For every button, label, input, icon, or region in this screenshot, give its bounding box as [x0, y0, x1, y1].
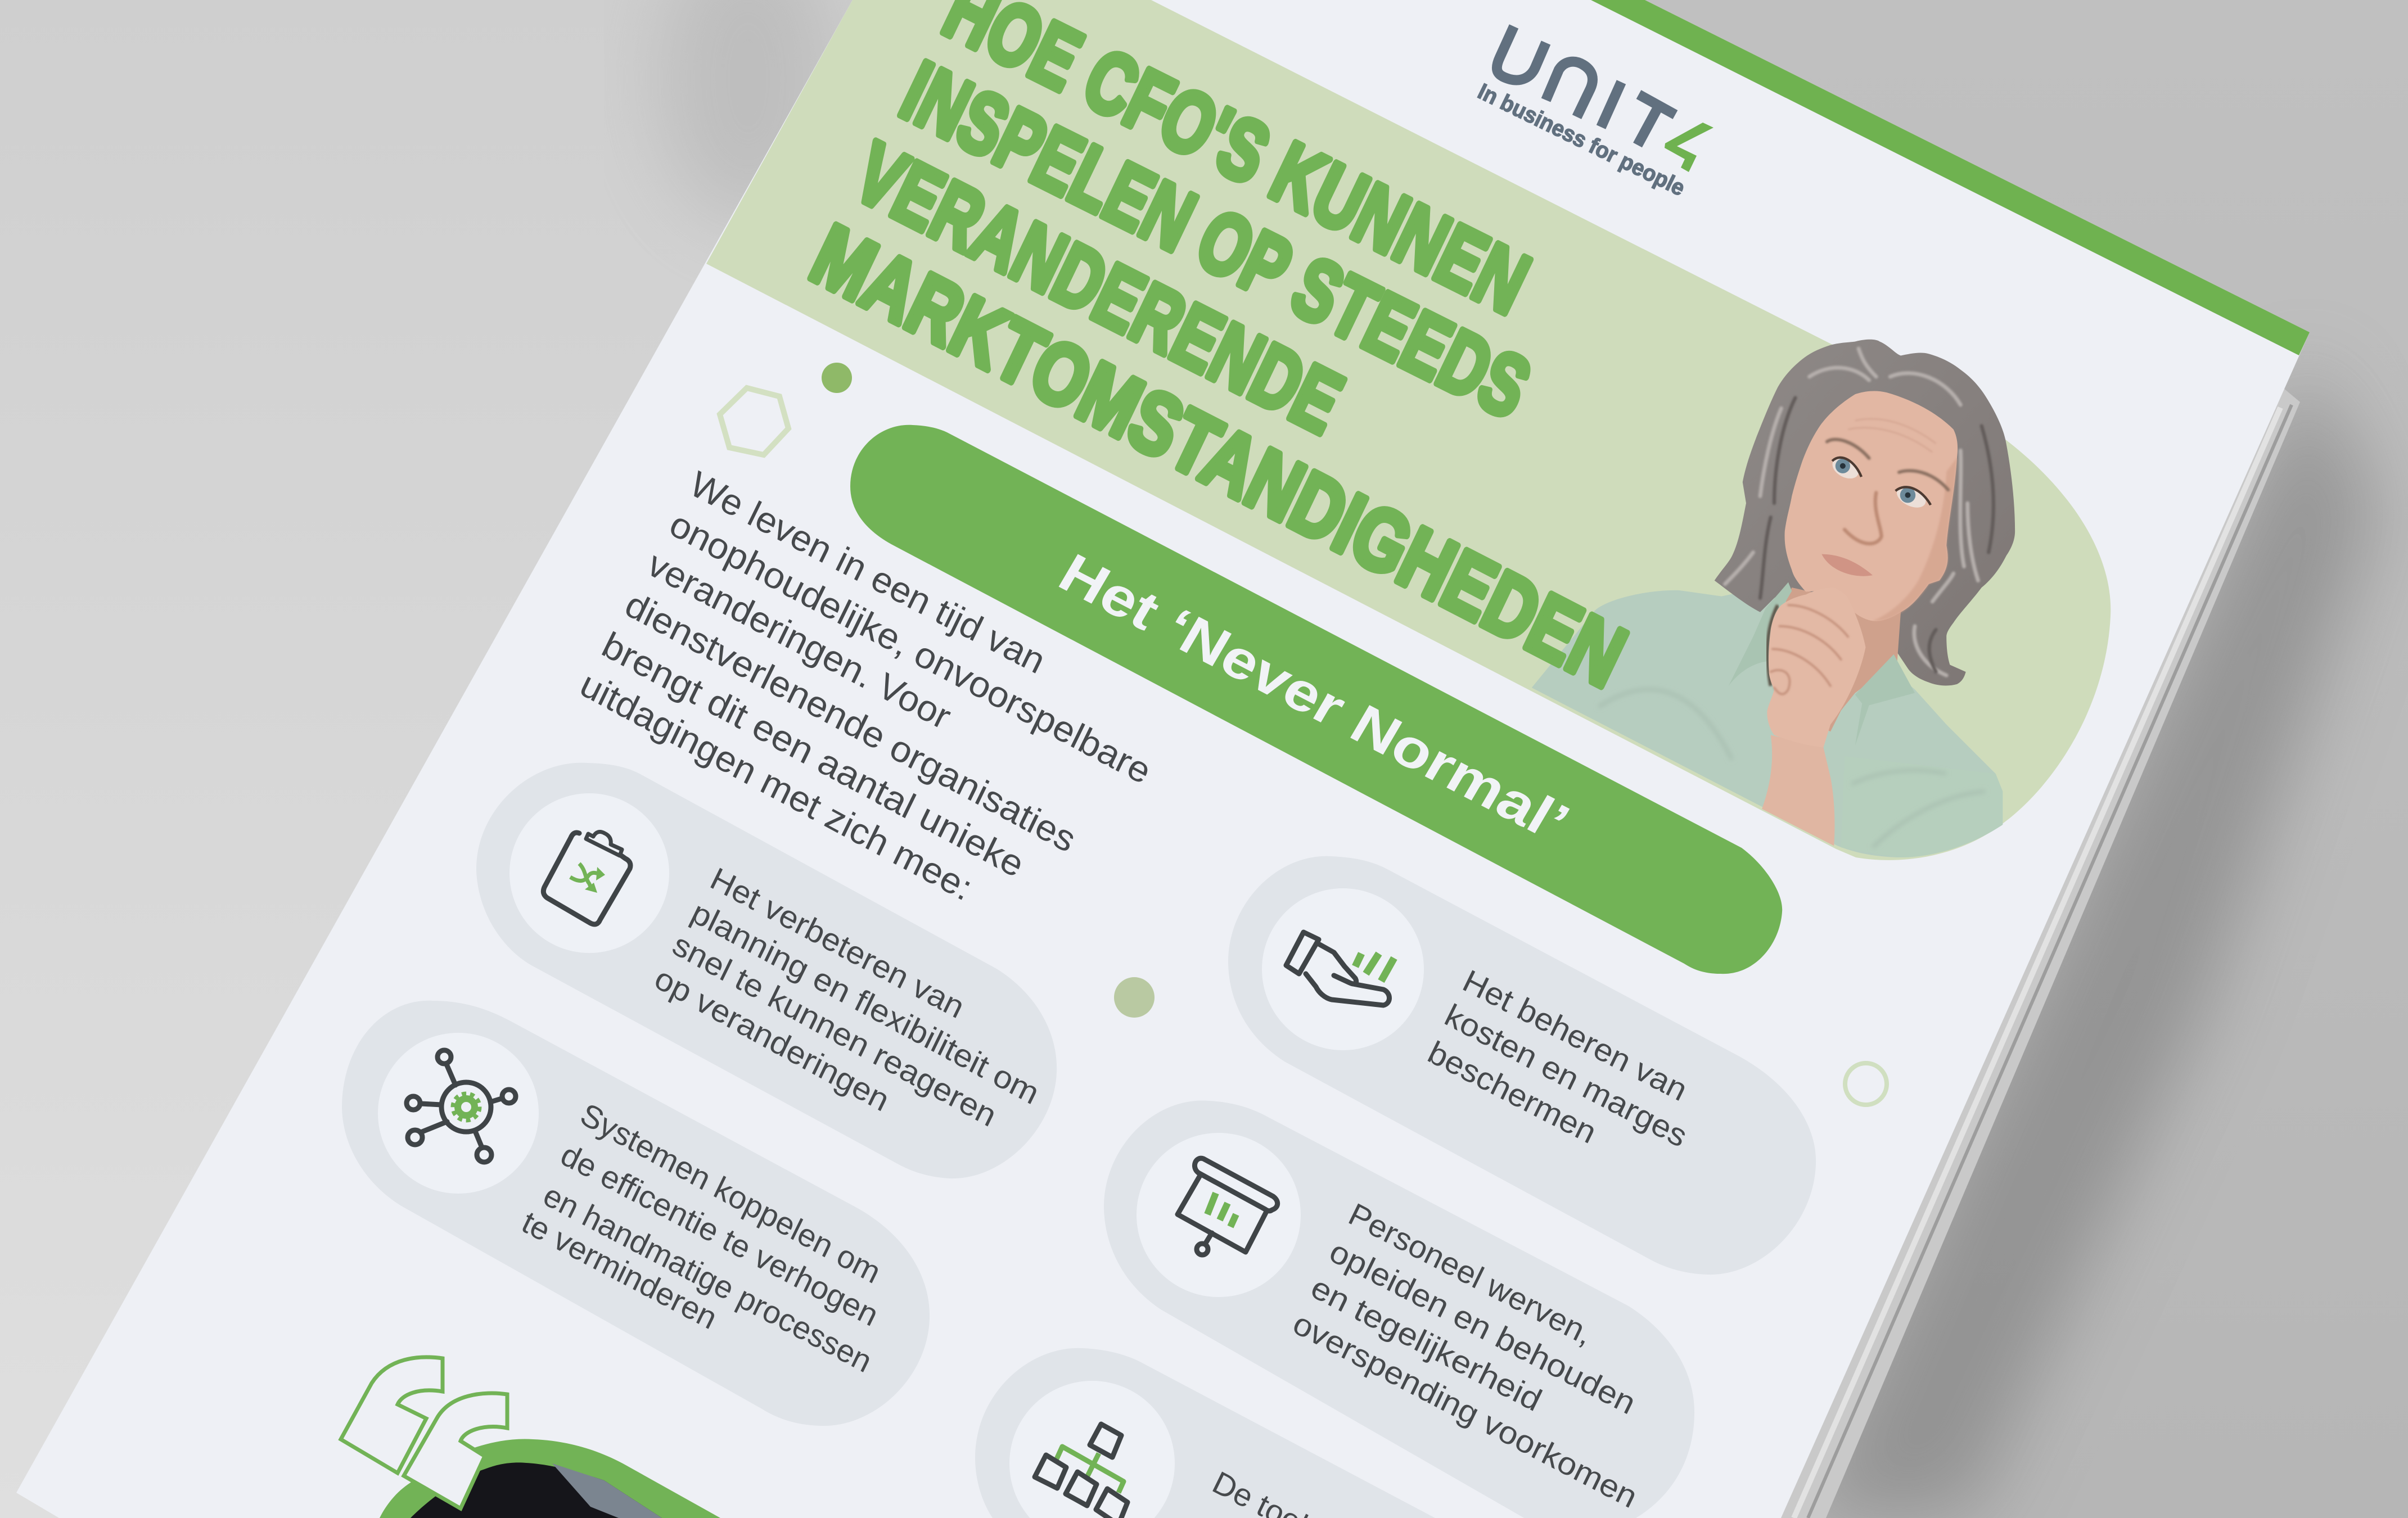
subtitle banner — [850, 425, 1782, 974]
panel: planning — [476, 763, 1057, 1178]
lips — [1821, 554, 1873, 576]
icon: network gear — [407, 1050, 516, 1162]
eyebrows — [1827, 440, 1948, 490]
neck — [1771, 588, 1901, 731]
panel: kosten — [1228, 856, 1816, 1275]
hair strands dark — [1760, 398, 1994, 672]
panel text: en tegelijkerheid — [1306, 1269, 1548, 1418]
fist — [1767, 588, 1866, 747]
panel text: op veranderingen — [650, 960, 895, 1118]
decorative dot — [822, 363, 852, 393]
collar left — [1729, 582, 1792, 686]
logo: Unit4 — [1474, 26, 1713, 201]
quote mark first — [341, 1357, 443, 1473]
title: MARKTOMSTANDIGHEDEN — [798, 206, 1639, 706]
title: VERANDERENDE — [841, 124, 1356, 452]
forearm — [1762, 735, 1834, 846]
intro text — [574, 463, 1157, 909]
decorative hexagon — [720, 388, 788, 455]
collar right — [1855, 654, 1915, 746]
panel text: beschermen — [1423, 1034, 1602, 1150]
icon: presentation board — [1178, 1158, 1278, 1255]
icon circle — [509, 793, 669, 953]
panel: personeel — [1104, 1101, 1694, 1518]
panel text — [650, 860, 1045, 1133]
panel text: Het verbeteren van — [705, 860, 970, 1025]
panel text: Systemen koppelen om — [575, 1096, 886, 1290]
panel text — [1423, 963, 1693, 1154]
icon: org chart — [1035, 1424, 1128, 1518]
panel text: overspending voorkomen — [1288, 1305, 1643, 1515]
panel text: opleiden en behouden — [1324, 1233, 1642, 1421]
quote mark second — [404, 1393, 507, 1508]
hair strands light — [1725, 349, 1978, 675]
panel text: en handmatige processen — [538, 1177, 878, 1379]
banner text: Het ‘Never Normal’ — [1049, 542, 1580, 853]
logo wordmark — [1497, 26, 1675, 145]
panel text: Personeel werven, — [1343, 1196, 1599, 1352]
panel text: Het beheren van — [1458, 963, 1693, 1108]
photo: thoughtful woman — [1715, 340, 2015, 846]
icon circle — [1262, 888, 1424, 1050]
icon circle — [1009, 1381, 1175, 1518]
panel: de toekomst (cropped) — [975, 1348, 1435, 1518]
face shading — [1873, 458, 1957, 621]
logo green 4 — [1665, 123, 1713, 172]
eyes — [1829, 453, 1931, 512]
icon: clipboard shuffle — [543, 832, 630, 924]
panel text — [517, 1096, 886, 1379]
header green panel — [706, 0, 2111, 860]
panel: systemen — [342, 1001, 930, 1426]
photo light wedge — [552, 1463, 662, 1518]
icon: hand with bars — [1286, 932, 1394, 1005]
intro text: veranderingen. Voor — [642, 543, 957, 737]
intro text: We leven in een tijd van — [684, 463, 1052, 681]
neck shadow — [1767, 605, 1778, 686]
panel text: te verminderen — [517, 1204, 723, 1336]
title — [798, 0, 1639, 706]
panel text: de efficentie te verhogen — [556, 1136, 884, 1333]
intro text: uitdagingen met zich mee: — [574, 663, 979, 909]
icon circle — [378, 1033, 539, 1194]
logo tagline: In business for people — [1474, 79, 1689, 201]
icon circle — [1137, 1133, 1301, 1297]
panel text: kosten en marges — [1440, 997, 1693, 1154]
decorative ring — [1845, 1063, 1887, 1105]
top green stripe — [1591, 0, 2310, 355]
intro text: dienstverlenende organisaties — [619, 584, 1082, 860]
panel text: snel te kunnen reageren — [668, 926, 1002, 1133]
hair — [1715, 340, 2015, 685]
decorative dot mid — [1114, 977, 1155, 1018]
forehead creases — [1848, 419, 1936, 452]
photo: shirt of woman — [1532, 582, 2003, 857]
panel text: planning en flexibiliteit om — [686, 894, 1045, 1111]
quote photo frame — [380, 1439, 720, 1518]
title: INSPELEN OP STEEDS — [888, 43, 1544, 437]
finger creases — [1771, 605, 1848, 694]
intro text: brengt dit een aantal unieke — [596, 624, 1030, 885]
stacked sheets under the page — [1780, 388, 2300, 1518]
nose — [1845, 493, 1882, 544]
photo — [411, 1462, 662, 1518]
face — [1785, 391, 1958, 621]
panel text — [1288, 1196, 1643, 1515]
intro text: onophoudelijke, onvoorspelbare — [664, 503, 1157, 792]
